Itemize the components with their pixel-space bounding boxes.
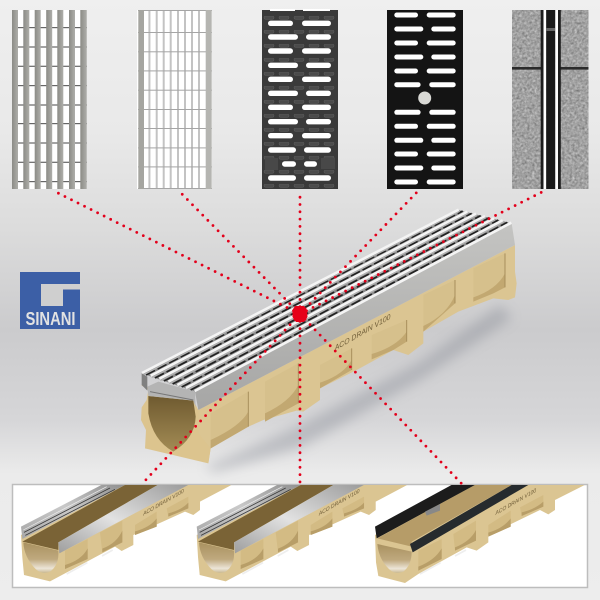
channel body side xyxy=(180,245,517,463)
main drainage channel xyxy=(141,210,517,463)
thumbnail: mesh grate xyxy=(137,10,212,189)
central hub marker xyxy=(292,306,308,322)
channel option: black rail edge: ACO DRAIN V100 xyxy=(494,488,536,518)
thumbnail: black grate with central hole xyxy=(387,10,463,189)
thumbnail: stainless bar grate xyxy=(12,10,87,189)
channel option: stainless rail edge xyxy=(21,484,233,581)
channel option: black rail edge xyxy=(375,484,587,583)
channel option: stainless wide rail xyxy=(197,484,409,581)
grate side frame xyxy=(195,223,515,410)
logo wordmark: SINANI xyxy=(26,309,76,329)
logo: SINANI xyxy=(20,272,80,329)
thumbnail: slot drain in paving xyxy=(512,10,588,189)
grate front frame xyxy=(142,373,147,391)
recessed side panels xyxy=(211,253,505,448)
dotted connector lines xyxy=(54,191,544,484)
bottom box: channel options xyxy=(12,484,588,588)
thumbnail: dark ductile iron grate with slots xyxy=(262,9,338,189)
channel front face xyxy=(141,385,211,463)
channel option: stainless rail edge: ACO DRAIN V100 xyxy=(142,488,184,518)
channel inner trough xyxy=(148,396,196,452)
main drainage channel shadow xyxy=(205,305,512,472)
product marking: ACO DRAIN V100 xyxy=(333,311,392,353)
channel option: stainless wide rail: ACO DRAIN V100 xyxy=(318,488,360,518)
grate top xyxy=(142,210,512,392)
